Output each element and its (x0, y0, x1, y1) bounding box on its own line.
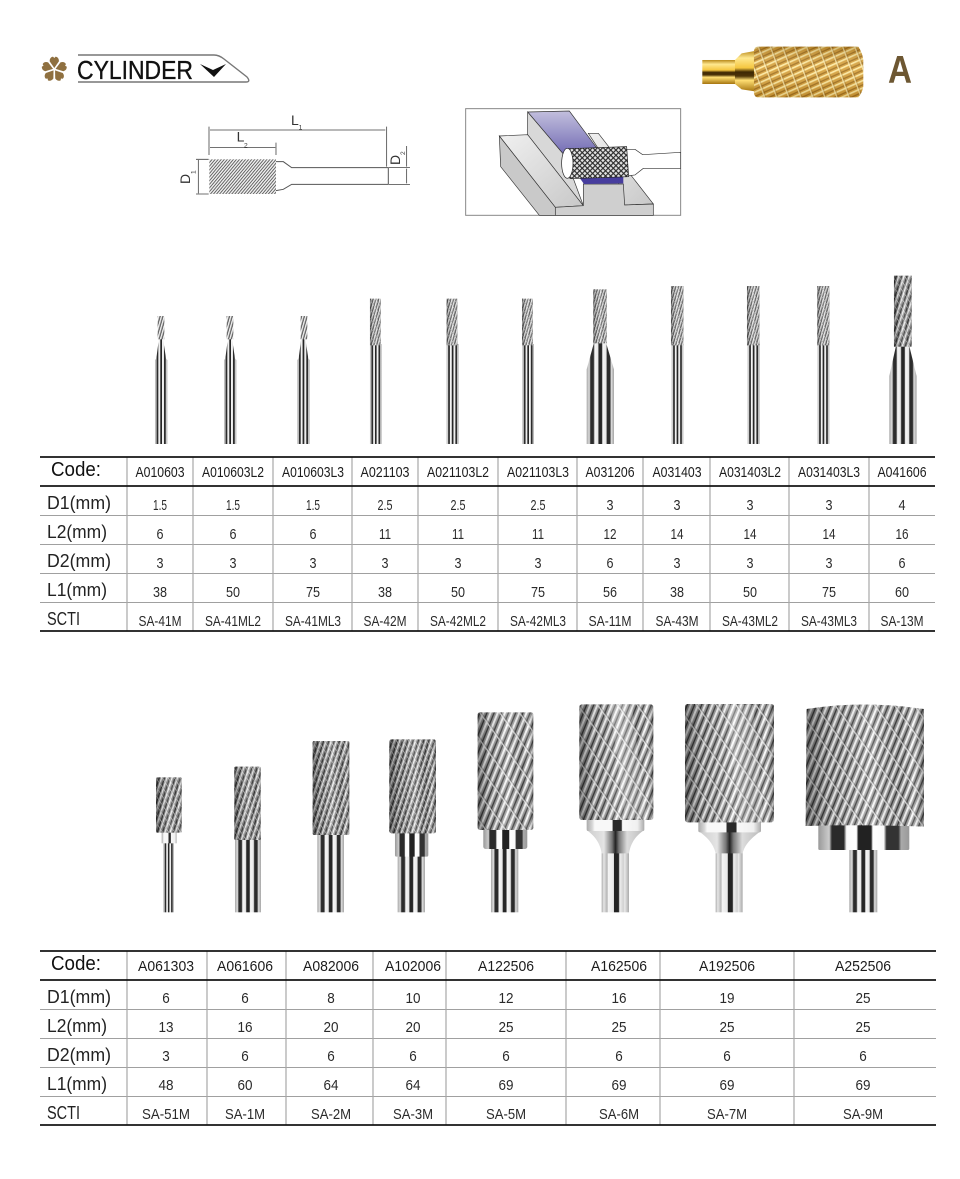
row: D2: 3 (162, 1048, 170, 1065)
row: code: A122506 (478, 958, 534, 975)
row: SCTI: SA-9M (843, 1106, 883, 1123)
table grid (40, 457, 935, 631)
row: D2: 6 (615, 1048, 623, 1065)
row: L2: L2(mm) (47, 1016, 107, 1036)
row: L1: 38 (153, 584, 167, 601)
row: SCTI: SCTI (47, 1103, 80, 1123)
row: D1: 3 (826, 497, 832, 514)
row: D2: 3 (230, 555, 236, 572)
row: L2: 16 (896, 526, 908, 543)
row: L1: 50 (743, 584, 757, 601)
bur A192506 (685, 704, 774, 912)
row: D1: 6 (162, 990, 170, 1007)
icon: chevron (200, 64, 226, 77)
row: D2: 6 (409, 1048, 417, 1065)
bur A031403L3 (817, 286, 829, 444)
row: D2: 6 (859, 1048, 867, 1065)
row: D1: 3 (674, 497, 680, 514)
row: code: Code: (51, 459, 101, 481)
row: L2: 6 (310, 526, 316, 543)
dimension labels: 1 (190, 170, 197, 174)
row: L2: 16 (238, 1019, 252, 1036)
row: L2: 12 (604, 526, 616, 543)
row: SCTI (47, 609, 924, 630)
product photo: gold cylinder bur (702, 47, 863, 97)
row: SCTI: SA-13M (880, 613, 924, 630)
row: D2: 6 (898, 555, 906, 572)
row: L2: 11 (532, 526, 544, 543)
bur A041606 (889, 276, 917, 444)
row: D2: D2(mm) (47, 551, 111, 571)
row: SCTI: SA-7M (707, 1106, 747, 1123)
row: code: A031403L2 (719, 464, 781, 481)
row: code: A082006 (303, 958, 359, 975)
row: L1: 69 (720, 1077, 734, 1094)
row: L1: 64 (406, 1077, 420, 1094)
row: L2: 25 (856, 1019, 870, 1036)
row: L1: 50 (451, 584, 465, 601)
row: code: A021103 (360, 464, 410, 481)
row: D1 (47, 987, 870, 1007)
row: D1: 1.5 (153, 497, 167, 514)
row: L1: 64 (324, 1077, 338, 1094)
row: code: A041606 (878, 464, 926, 481)
row: L1: 56 (603, 584, 617, 601)
row: L1: 38 (378, 584, 392, 601)
row: D1: 2.5 (530, 497, 546, 514)
row: D1: 10 (406, 990, 420, 1007)
row: D2: 6 (502, 1048, 510, 1065)
row: L2: 14 (670, 526, 684, 543)
row: L2 (47, 1016, 870, 1036)
dimension labels: L (291, 112, 299, 128)
row: code: A192506 (699, 958, 755, 975)
row: D1: 2.5 (378, 497, 392, 514)
title: CYLINDER (77, 55, 193, 85)
row: SCTI: SCTI (47, 609, 80, 629)
row: SCTI: SA-1M (225, 1106, 265, 1123)
row: SCTI: SA-5M (486, 1106, 526, 1123)
row: D1: 1.5 (306, 497, 320, 514)
row: L1: 60 (238, 1077, 252, 1094)
row: L2: 25 (498, 1019, 514, 1036)
dimension labels: 2 (400, 151, 407, 155)
row: L2: 6 (156, 526, 164, 543)
product row: slim burs (155, 276, 917, 444)
row: D2: 3 (826, 555, 832, 572)
row: SCTI: SA-2M (311, 1106, 351, 1123)
dimension labels: 2 (244, 142, 248, 149)
row: D1: 1.5 (226, 497, 240, 514)
row: L2 (47, 522, 908, 543)
row: code (51, 953, 891, 975)
bur A021103L2 (447, 299, 459, 444)
application diagram (466, 109, 681, 215)
row: L2: 11 (452, 526, 464, 543)
icon: gold flower (41, 57, 68, 82)
row: D2: 3 (156, 555, 164, 572)
row: code: A010603L2 (202, 464, 264, 481)
row: L2: 11 (379, 526, 391, 543)
row: D2: 6 (327, 1048, 335, 1065)
row: D2 (47, 1045, 867, 1065)
row: SCTI: SA-43ML3 (801, 613, 857, 630)
row: SCTI: SA-43ML2 (722, 613, 778, 630)
row: D1: D1(mm) (47, 493, 111, 513)
bur A031206 (587, 289, 614, 444)
row: L2: 14 (744, 526, 756, 543)
dimension labels: L (237, 129, 245, 145)
dimension labels: D (387, 155, 403, 165)
table: wide burs (40, 951, 936, 1125)
row: SCTI: SA-42M (364, 613, 406, 630)
row: D1 (47, 493, 906, 514)
row: L2: 20 (406, 1019, 420, 1036)
row: L2: 6 (230, 526, 236, 543)
bur A162506 (579, 704, 653, 912)
row: D2: 3 (454, 555, 462, 572)
row: L1: 75 (531, 584, 545, 601)
row: D2: 6 (606, 555, 614, 572)
dimension labels: 1 (299, 124, 303, 131)
row: code: A061606 (217, 958, 273, 975)
row: D2: 3 (746, 555, 754, 572)
bur A061606 (234, 767, 261, 912)
row: D2: D2(mm) (47, 1045, 111, 1065)
bur A061303 (156, 777, 182, 912)
table: slim burs (40, 457, 935, 631)
bur A021103 (370, 299, 382, 444)
row: L1: L1(mm) (47, 1074, 107, 1094)
row: L1: 50 (226, 584, 240, 601)
row: D1: 8 (327, 990, 335, 1007)
row: L1: L1(mm) (47, 580, 107, 600)
row: L1: 69 (856, 1077, 870, 1094)
row: SCTI: SA-3M (393, 1106, 433, 1123)
technical drawing: dimensions (177, 112, 410, 194)
row: L1: 75 (822, 584, 836, 601)
bur A021103L3 (522, 299, 534, 444)
product row: wide burs (156, 704, 924, 912)
row: L2: L2(mm) (47, 522, 107, 542)
row: D1: 3 (746, 497, 754, 514)
row: code: A252506 (835, 958, 891, 975)
row: D2: 3 (310, 555, 316, 572)
row: code: A061303 (138, 958, 194, 975)
dimension labels: D (177, 174, 193, 184)
row: D1: 25 (856, 990, 870, 1007)
row: SCTI: SA-42ML2 (430, 613, 486, 630)
row: D1: D1(mm) (47, 987, 111, 1007)
row: SCTI: SA-6M (599, 1106, 639, 1123)
row: L2: 14 (822, 526, 836, 543)
row: SCTI: SA-43M (656, 613, 698, 630)
bur A010603 (155, 316, 167, 444)
bur A102006 (389, 739, 436, 912)
row: code: A102006 (385, 958, 441, 975)
row: L1: 48 (158, 1077, 174, 1094)
row: code: A021103L3 (507, 464, 569, 481)
row: SCTI: SA-41ML3 (285, 613, 341, 630)
heading: cylinder banner (41, 55, 249, 85)
row: code (51, 459, 926, 481)
row: SCTI: SA-11M (588, 613, 632, 630)
row: L1: 60 (895, 584, 909, 601)
row: D2: 6 (723, 1048, 731, 1065)
row: L1: 69 (498, 1077, 514, 1094)
row: code: A021103L2 (427, 464, 489, 481)
bur A031403 (671, 286, 683, 444)
row: code: A031206 (586, 464, 634, 481)
row: D1: 6 (241, 990, 249, 1007)
type letter A: A (888, 49, 912, 92)
dimension labels (177, 112, 407, 184)
row: L1: 69 (612, 1077, 626, 1094)
row: code: A010603L3 (282, 464, 344, 481)
row: SCTI: SA-51M (142, 1106, 190, 1123)
row: D1: 3 (606, 497, 614, 514)
row: D2: 3 (674, 555, 680, 572)
banner outline (78, 55, 249, 82)
row: D1: 4 (898, 497, 906, 514)
row: D2: 3 (382, 555, 388, 572)
row: D2 (47, 551, 906, 572)
row: code: A162506 (591, 958, 647, 975)
row: L2: 25 (612, 1019, 626, 1036)
row: D1: 2.5 (450, 497, 466, 514)
row: L2: 25 (720, 1019, 734, 1036)
dimension lines (196, 127, 410, 194)
row: L1: 75 (306, 584, 320, 601)
row: D1: 12 (498, 990, 514, 1007)
bur A010603L3 (297, 316, 310, 444)
row: D1: 19 (720, 990, 734, 1007)
bur A082006 (313, 741, 349, 912)
row: SCTI: SA-41M (138, 613, 182, 630)
row: code: A031403 (652, 464, 702, 481)
bur A031403L2 (747, 286, 760, 444)
row: code: A031403L3 (798, 464, 860, 481)
bur A252506 (806, 704, 924, 912)
row: SCTI: SA-41ML2 (205, 613, 261, 630)
row: D2: 3 (534, 555, 542, 572)
row: SCTI: SA-42ML3 (510, 613, 566, 630)
table grid (40, 951, 936, 1125)
row: L1 (47, 1074, 870, 1094)
row: code: A010603 (136, 464, 184, 481)
row: D2: 6 (241, 1048, 249, 1065)
row: L2: 13 (158, 1019, 174, 1036)
row: L1: 38 (670, 584, 684, 601)
bur A122506 (478, 712, 533, 912)
row: L2: 20 (324, 1019, 338, 1036)
row: L1 (47, 580, 909, 601)
row: D1: 16 (612, 990, 626, 1007)
row: code: Code: (51, 953, 101, 975)
row: SCTI (47, 1103, 883, 1123)
bur A010603L2 (224, 316, 236, 444)
bur outline (209, 159, 388, 194)
